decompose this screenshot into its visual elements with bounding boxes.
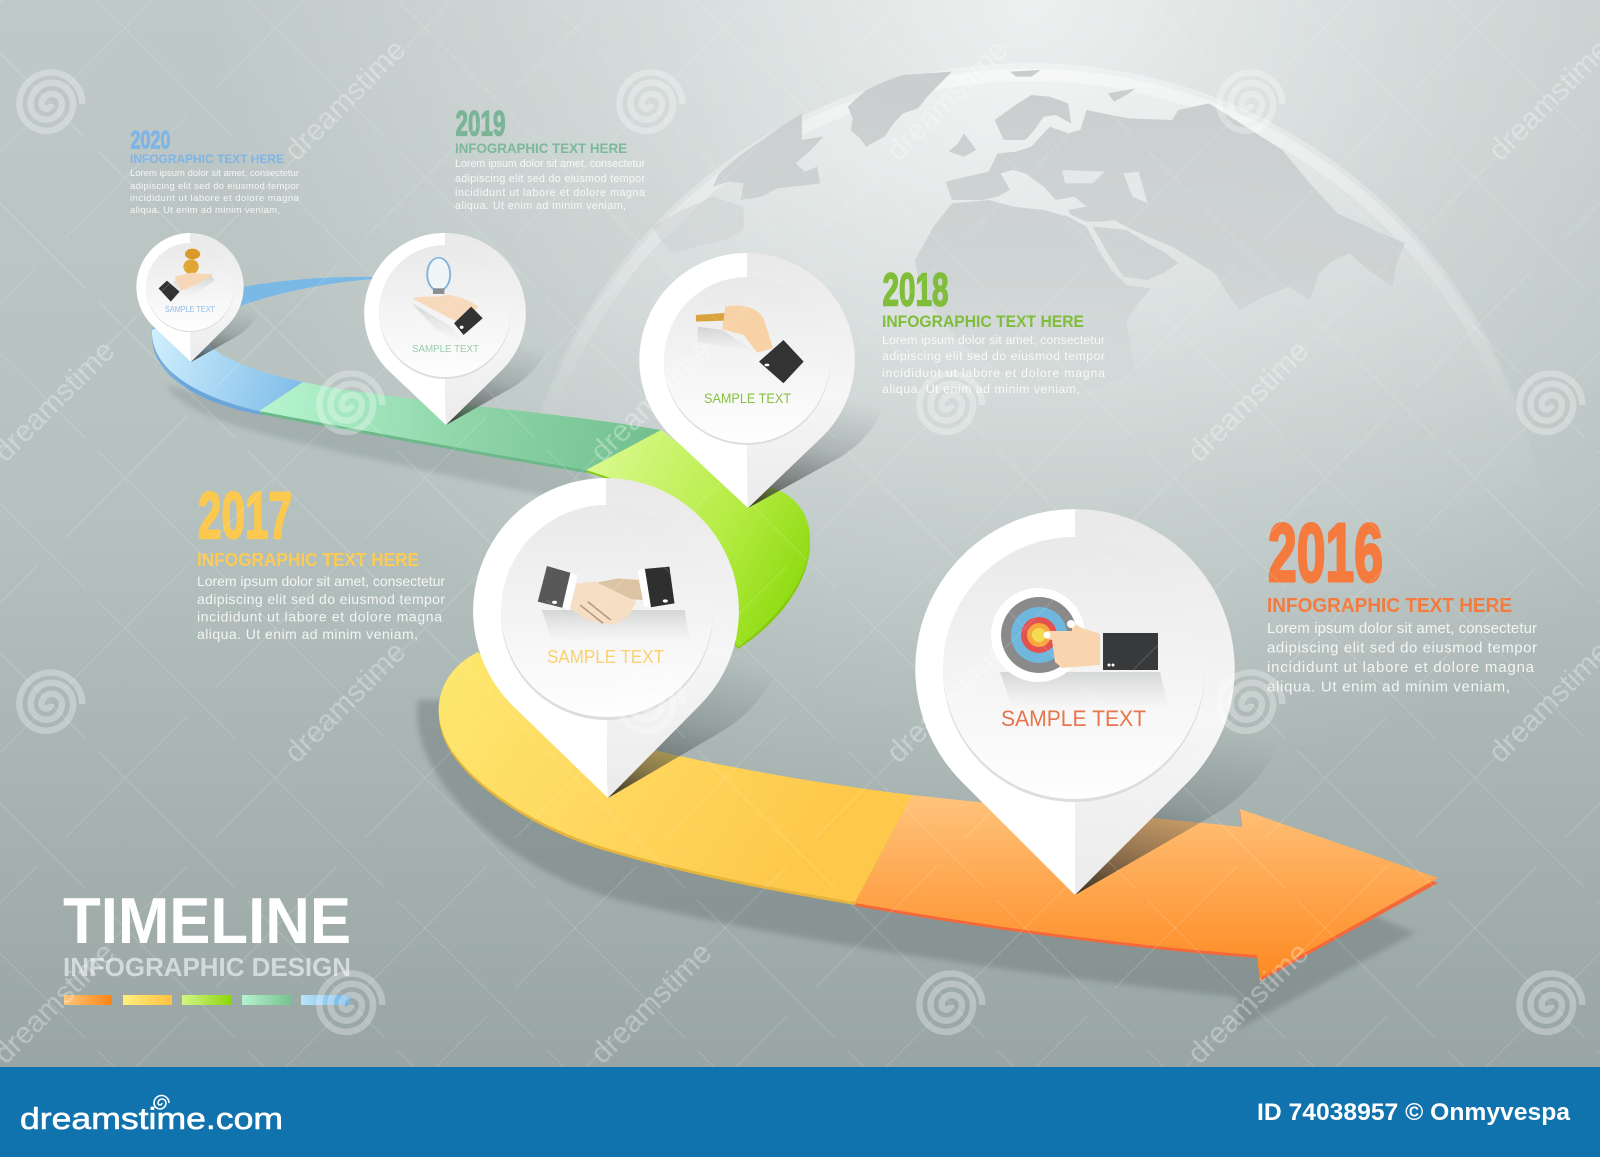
world globe — [512, 63, 1548, 1099]
body: adipiscing elit sed do eiusmod tempor — [130, 181, 299, 192]
body: Lorem ipsum dolor sit amet, consectetur — [197, 573, 445, 589]
watermark text: dreamstime — [278, 33, 412, 167]
icon: target with hand — [991, 588, 1168, 708]
body — [130, 168, 300, 216]
footer bar — [0, 1067, 1600, 1157]
text block 2017 — [197, 478, 445, 642]
subtitle: INFOGRAPHIC DESIGN — [63, 952, 351, 982]
heading: INFOGRAPHIC TEXT HERE — [455, 140, 627, 156]
label: sample text: SAMPLE TEXT — [547, 647, 664, 667]
segment: yellow 2017 — [439, 652, 912, 905]
heading: INFOGRAPHIC TEXT HERE — [130, 152, 284, 166]
year: 2019 — [456, 104, 506, 144]
body: incididunt ut labore et dolore magna — [455, 187, 645, 199]
watermark text: dreamstime — [278, 635, 412, 769]
segment: orange 2016 arrow — [855, 795, 1438, 981]
title block — [63, 884, 351, 1005]
label: sample text: SAMPLE TEXT — [412, 343, 480, 355]
watermark text: dreamstime — [584, 334, 718, 468]
segment: lime 2018 — [586, 430, 810, 649]
body: Lorem ipsum dolor sit amet, consectetur — [1267, 620, 1537, 637]
icon: handshake — [538, 566, 690, 642]
segment: blue 2020 — [152, 277, 374, 415]
body: incididunt ut labore et dolore magna — [130, 193, 300, 204]
body: aliqua. Ut enim ad minim veniam, — [455, 200, 626, 212]
watermark text: dreamstime — [1181, 936, 1315, 1070]
pin 2018 — [639, 234, 916, 535]
body: aliqua. Ut enim ad minim veniam, — [882, 382, 1080, 396]
body: adipiscing elit sed do eiusmod tempor — [882, 349, 1105, 363]
ribbon ground shadow — [417, 700, 1415, 1030]
text block 2020 — [130, 126, 300, 216]
year: 2017 — [198, 478, 292, 552]
image id and credit: ID 74038957 © Onmyvespa — [1257, 1099, 1571, 1126]
year: 2018 — [882, 264, 948, 316]
pin 2019 — [364, 219, 572, 445]
body: aliqua. Ut enim ad minim veniam, — [130, 205, 280, 216]
icon: coins in hand — [159, 249, 215, 302]
body: incididunt ut labore et dolore magna — [197, 608, 442, 624]
heading: INFOGRAPHIC TEXT HERE — [1267, 595, 1512, 617]
body — [882, 333, 1105, 396]
body: adipiscing elit sed do eiusmod tempor — [1267, 640, 1537, 656]
footer logo spiral — [154, 1096, 169, 1109]
body: Lorem ipsum dolor sit amet, consectetur — [130, 168, 299, 179]
body: aliqua. Ut enim ad minim veniam, — [197, 626, 418, 642]
body — [455, 158, 645, 212]
watermark text: dreamstime — [584, 936, 718, 1070]
ribbon shadow upper — [165, 385, 600, 505]
body — [1267, 620, 1537, 696]
title: TIMELINE — [63, 884, 351, 957]
heading: INFOGRAPHIC TEXT HERE — [197, 550, 419, 570]
body: Lorem ipsum dolor sit amet, consectetur — [882, 333, 1105, 347]
icon: bulb in hand — [412, 258, 483, 343]
body: adipiscing elit sed do eiusmod tempor — [455, 173, 645, 185]
body: incididunt ut labore et dolore magna — [882, 366, 1105, 380]
body — [197, 573, 445, 642]
body: aliqua. Ut enim ad minim veniam, — [1267, 678, 1510, 696]
body: adipiscing elit sed do eiusmod tempor — [197, 591, 445, 607]
text block 2016 — [1267, 506, 1537, 696]
label: sample text: SAMPLE TEXT — [165, 305, 215, 314]
label: sample text: SAMPLE TEXT — [704, 390, 791, 406]
pin 2017 — [473, 454, 817, 832]
pin 2020 — [136, 223, 276, 376]
segment: green 2019 — [259, 382, 661, 473]
icon: key in hand — [696, 306, 804, 383]
pin 2016 — [915, 480, 1330, 936]
body: Lorem ipsum dolor sit amet, consectetur — [455, 158, 645, 170]
label: sample text: SAMPLE TEXT — [1001, 706, 1146, 731]
text block 2019 — [455, 104, 645, 212]
heading: INFOGRAPHIC TEXT HERE — [882, 313, 1084, 331]
watermark text: dreamstime — [880, 33, 1014, 167]
year: 2020 — [130, 126, 170, 154]
year: 2016 — [1268, 506, 1383, 599]
timeline ribbon — [152, 277, 1438, 981]
continents — [652, 70, 1405, 407]
body: incididunt ut labore et dolore magna — [1267, 659, 1535, 676]
legend bars — [64, 995, 350, 1005]
watermark text: dreamstime — [1181, 334, 1315, 468]
footer logo text: dreamstime.com — [20, 1101, 283, 1136]
watermark text: dreamstime — [880, 635, 1014, 769]
text block 2018 — [882, 264, 1105, 396]
